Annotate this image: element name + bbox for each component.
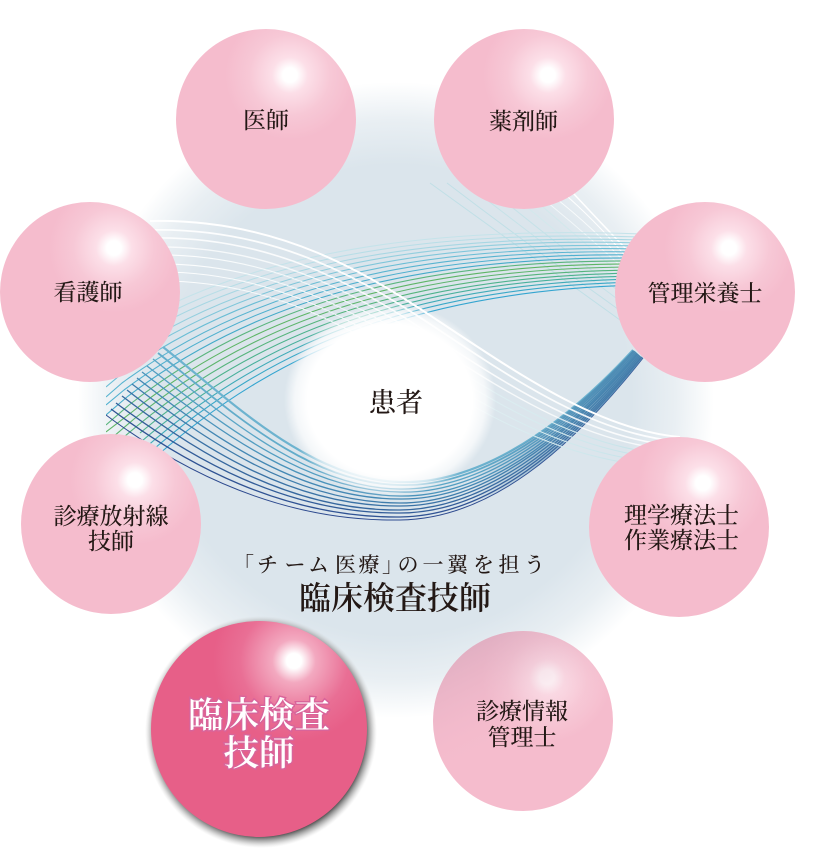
node: health information manager: [433, 631, 613, 811]
label: patient: 患者: [369, 388, 423, 418]
node: pharmacist: [434, 29, 614, 209]
center white glow: [284, 303, 496, 497]
node: health information manager: 診療情報: [476, 699, 568, 724]
node: radiological technologist: [21, 434, 201, 614]
node: physical and occupational therapist: 作業療法士: [624, 528, 739, 553]
background glow: [78, 82, 714, 718]
node: dietitian: [615, 202, 795, 382]
faint diagonal lines upper right: [430, 183, 627, 320]
node: health information manager: 管理士: [488, 725, 556, 750]
node: clinical laboratory technologist highlighted: 技師: [223, 733, 295, 773]
flowing lines: [106, 183, 680, 520]
node: pharmacist: 薬剤師: [489, 109, 558, 134]
dark blue dipping line bundle: [106, 347, 643, 520]
node: physical and occupational therapist: [589, 437, 769, 617]
node: radiological technologist: 診療放射線: [54, 504, 168, 529]
node: clinical laboratory technologist highlighted: 臨床検査: [188, 695, 330, 735]
white crossing line bundle: [150, 221, 680, 466]
node: nurse: [0, 202, 180, 382]
node: radiological technologist: 技師: [88, 529, 134, 554]
heading: clinical laboratory technologist: 臨床検査技師: [299, 580, 491, 616]
node: dietitian: 管理栄養士: [648, 281, 762, 306]
node: clinical laboratory technologist highlighted: [145, 616, 377, 848]
node: doctor: [176, 29, 356, 209]
node: doctor: 医師: [243, 108, 289, 133]
caption: team medicine tagline: 「チーム医療」の一翼を担う: [233, 553, 545, 577]
rising blue and green line bundle: [106, 233, 640, 462]
node: nurse: 看護師: [54, 280, 122, 305]
node: physical and occupational therapist: 理学療法士: [624, 503, 739, 528]
